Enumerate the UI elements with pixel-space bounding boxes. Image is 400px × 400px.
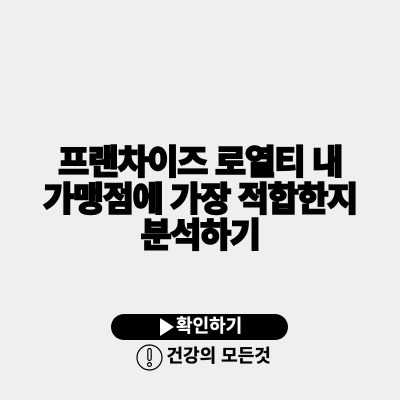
title: 분석하기 bbox=[140, 217, 260, 255]
title: 가맹점에 가장 적합한지 bbox=[43, 181, 357, 219]
icon: play triangle bbox=[160, 318, 174, 336]
brand label: 건강의 모든것 bbox=[166, 346, 271, 366]
title: 프랜차이즈 로열티 내 bbox=[58, 144, 342, 182]
button: confirm bbox=[111, 314, 288, 340]
title bbox=[42, 144, 357, 255]
icon: exclamation circle bbox=[136, 344, 163, 371]
button label: 확인하기 bbox=[176, 316, 242, 336]
